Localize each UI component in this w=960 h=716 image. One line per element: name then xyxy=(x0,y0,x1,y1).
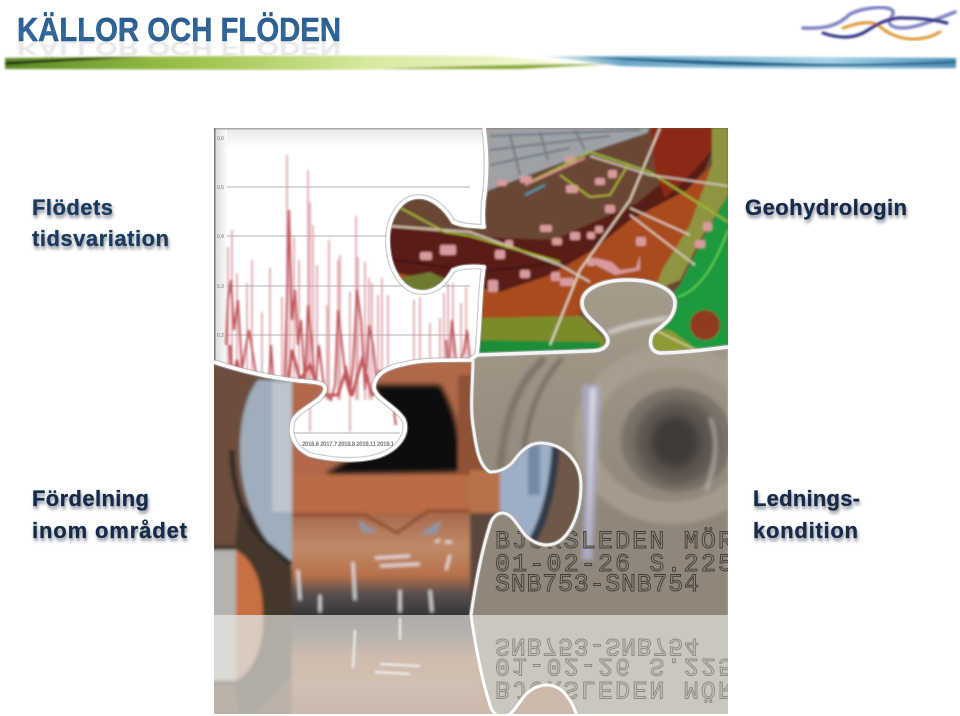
title xyxy=(17,11,341,60)
label: Lednings-kondition: kondition xyxy=(753,518,858,543)
burned-in video caption: SNB753-SNB754 xyxy=(495,570,699,599)
axis labels: 0,2 xyxy=(217,333,224,339)
label: Flödets tidsvariation: Flödets xyxy=(32,195,113,220)
flow spikes xyxy=(226,155,470,432)
puzzle piece: flow time series chart (top left) xyxy=(214,128,489,463)
logo: three intertwined waves xyxy=(803,7,955,39)
label: Fördelning inom området: inom området xyxy=(32,518,188,543)
label: Geohydrologin: Geohydrologin xyxy=(745,195,907,220)
label: Fördelning inom området: Fördelning xyxy=(32,486,149,511)
burned-in video caption: 01-02-26 S.225 xyxy=(495,550,733,579)
puzzle piece: geohydrology map (top right) xyxy=(380,125,730,360)
header banner swoosh xyxy=(5,56,956,70)
mirrored reflection of the puzzle: SNB753-SNB754 xyxy=(495,631,699,660)
label: Lednings-kondition xyxy=(753,486,860,543)
label: Fördelning inom området xyxy=(32,486,188,543)
mirrored reflection of the puzzle: 01-02-26 S.225 xyxy=(495,651,733,680)
gridlines xyxy=(227,187,470,433)
axis labels: 0,5 xyxy=(217,185,224,191)
axis labels: 0,4 xyxy=(217,234,224,240)
mirrored reflection of the puzzle xyxy=(214,615,728,714)
burned-in video caption xyxy=(496,527,728,592)
puzzle piece: pipe interior photo (bottom left) xyxy=(214,361,580,615)
label: Flödets tidsvariation: tidsvariation xyxy=(32,226,169,251)
label: Lednings-kondition: Lednings- xyxy=(753,486,860,511)
axis labels: 2016.8 2017.7 2018.8 2019.11 2019.1 xyxy=(302,442,395,448)
axis labels: 0,3 xyxy=(217,284,224,290)
title: KÄLLOR OCH FLÖDEN xyxy=(17,11,341,48)
label: Flödets tidsvariation xyxy=(32,195,169,251)
axis labels: 0,6 xyxy=(217,136,224,142)
burned-in video caption: BJÖRSLEDEN MÖR xyxy=(495,527,733,556)
axis labels xyxy=(217,136,395,448)
title: KÄLLOR OCH FLÖDEN xyxy=(17,37,341,60)
puzzle piece: pipe condition photo (bottom right) xyxy=(472,282,728,615)
mirrored reflection of the puzzle: BJÖRSLEDEN MÖR xyxy=(495,674,733,703)
puzzle seams xyxy=(214,128,728,615)
